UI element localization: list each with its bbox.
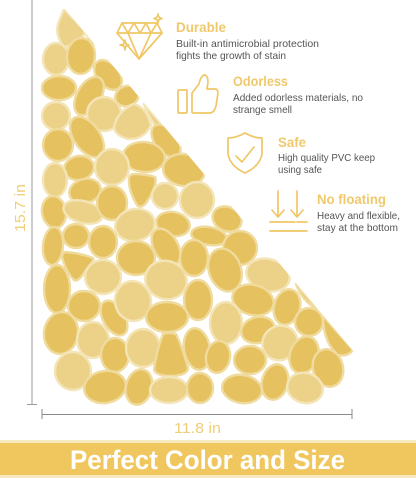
feature: durable <box>176 19 319 62</box>
feature: durable: Durable <box>176 19 226 35</box>
feature: durable: Built-in antimicrobial protection <box>176 38 319 50</box>
pebble bath mat <box>39 9 353 408</box>
feature: no floating <box>317 191 400 234</box>
feature: no floating: stay at the bottom <box>317 222 398 234</box>
feature: odorless: Added odorless materials, no <box>233 92 363 104</box>
feature: durable: fights the growth of stain <box>176 50 286 62</box>
feature: odorless: strange smell <box>233 104 292 116</box>
height dimension line <box>27 0 37 404</box>
icon: shield with check <box>228 133 262 173</box>
icon: sinking arrows <box>270 191 307 231</box>
height label: 15.7 in <box>12 184 29 232</box>
feature: no floating: Heavy and flexible, <box>317 210 400 222</box>
feature: no floating: No floating <box>317 191 386 207</box>
width label: 11.8 in <box>174 420 221 437</box>
width dimension line <box>42 409 352 419</box>
feature: safe <box>278 134 375 176</box>
icon: diamond <box>117 14 162 59</box>
feature: odorless <box>233 73 363 116</box>
banner title: Perfect Color and Size <box>70 445 345 475</box>
feature: odorless: Odorless <box>233 73 288 89</box>
icon: thumbs up <box>178 75 218 113</box>
feature: safe: using safe <box>278 164 322 176</box>
feature: safe: High quality PVC keep <box>278 152 375 164</box>
bottom banner <box>0 440 416 478</box>
feature: safe: Safe <box>278 134 306 150</box>
